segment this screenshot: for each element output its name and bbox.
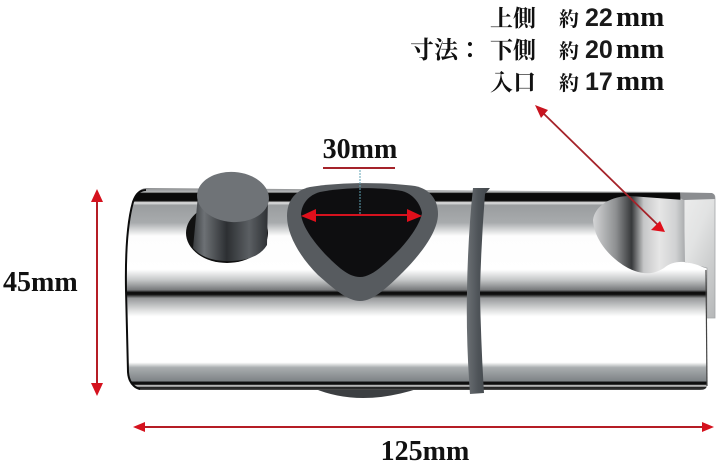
hook end piece	[660, 193, 715, 318]
hand shower cradle cutout	[593, 196, 685, 273]
width arrow	[133, 422, 714, 432]
45mm label: 45mm	[3, 267, 78, 298]
label underline	[323, 167, 395, 169]
cylinder body	[126, 188, 707, 390]
hose opening	[287, 183, 438, 301]
size callout: 17	[585, 68, 613, 96]
size callout: mm	[616, 1, 664, 33]
body right edge	[706, 270, 707, 386]
height arrow	[91, 189, 103, 396]
knob side	[193, 195, 268, 261]
grommet	[287, 183, 438, 301]
strap ring	[467, 188, 490, 394]
knob top	[195, 170, 271, 224]
knob hole	[186, 203, 268, 263]
label: sizes: 寸法：	[410, 37, 482, 64]
size callout: 20	[585, 36, 613, 64]
30mm dimension	[301, 134, 422, 222]
size callout: 22	[585, 4, 613, 32]
body left edge	[126, 190, 146, 389]
diagonal arrow	[535, 105, 665, 232]
size callout: mm	[616, 33, 664, 65]
knob	[186, 170, 271, 263]
bottom bump	[313, 388, 420, 398]
lower row: 下側	[490, 38, 536, 63]
entrance row: 入口	[490, 70, 536, 95]
opening	[301, 188, 422, 277]
30mm label: 30mm	[323, 134, 397, 165]
size callout: 約	[559, 8, 579, 31]
width arrow	[301, 209, 422, 222]
dashed leader	[359, 170, 361, 215]
size callout: 約	[559, 40, 579, 63]
size callout: 約	[559, 72, 579, 95]
size callout	[410, 1, 664, 97]
upper row: 上側	[490, 6, 536, 31]
size callout: mm	[616, 65, 664, 97]
holder: chrome slider body	[126, 188, 715, 398]
